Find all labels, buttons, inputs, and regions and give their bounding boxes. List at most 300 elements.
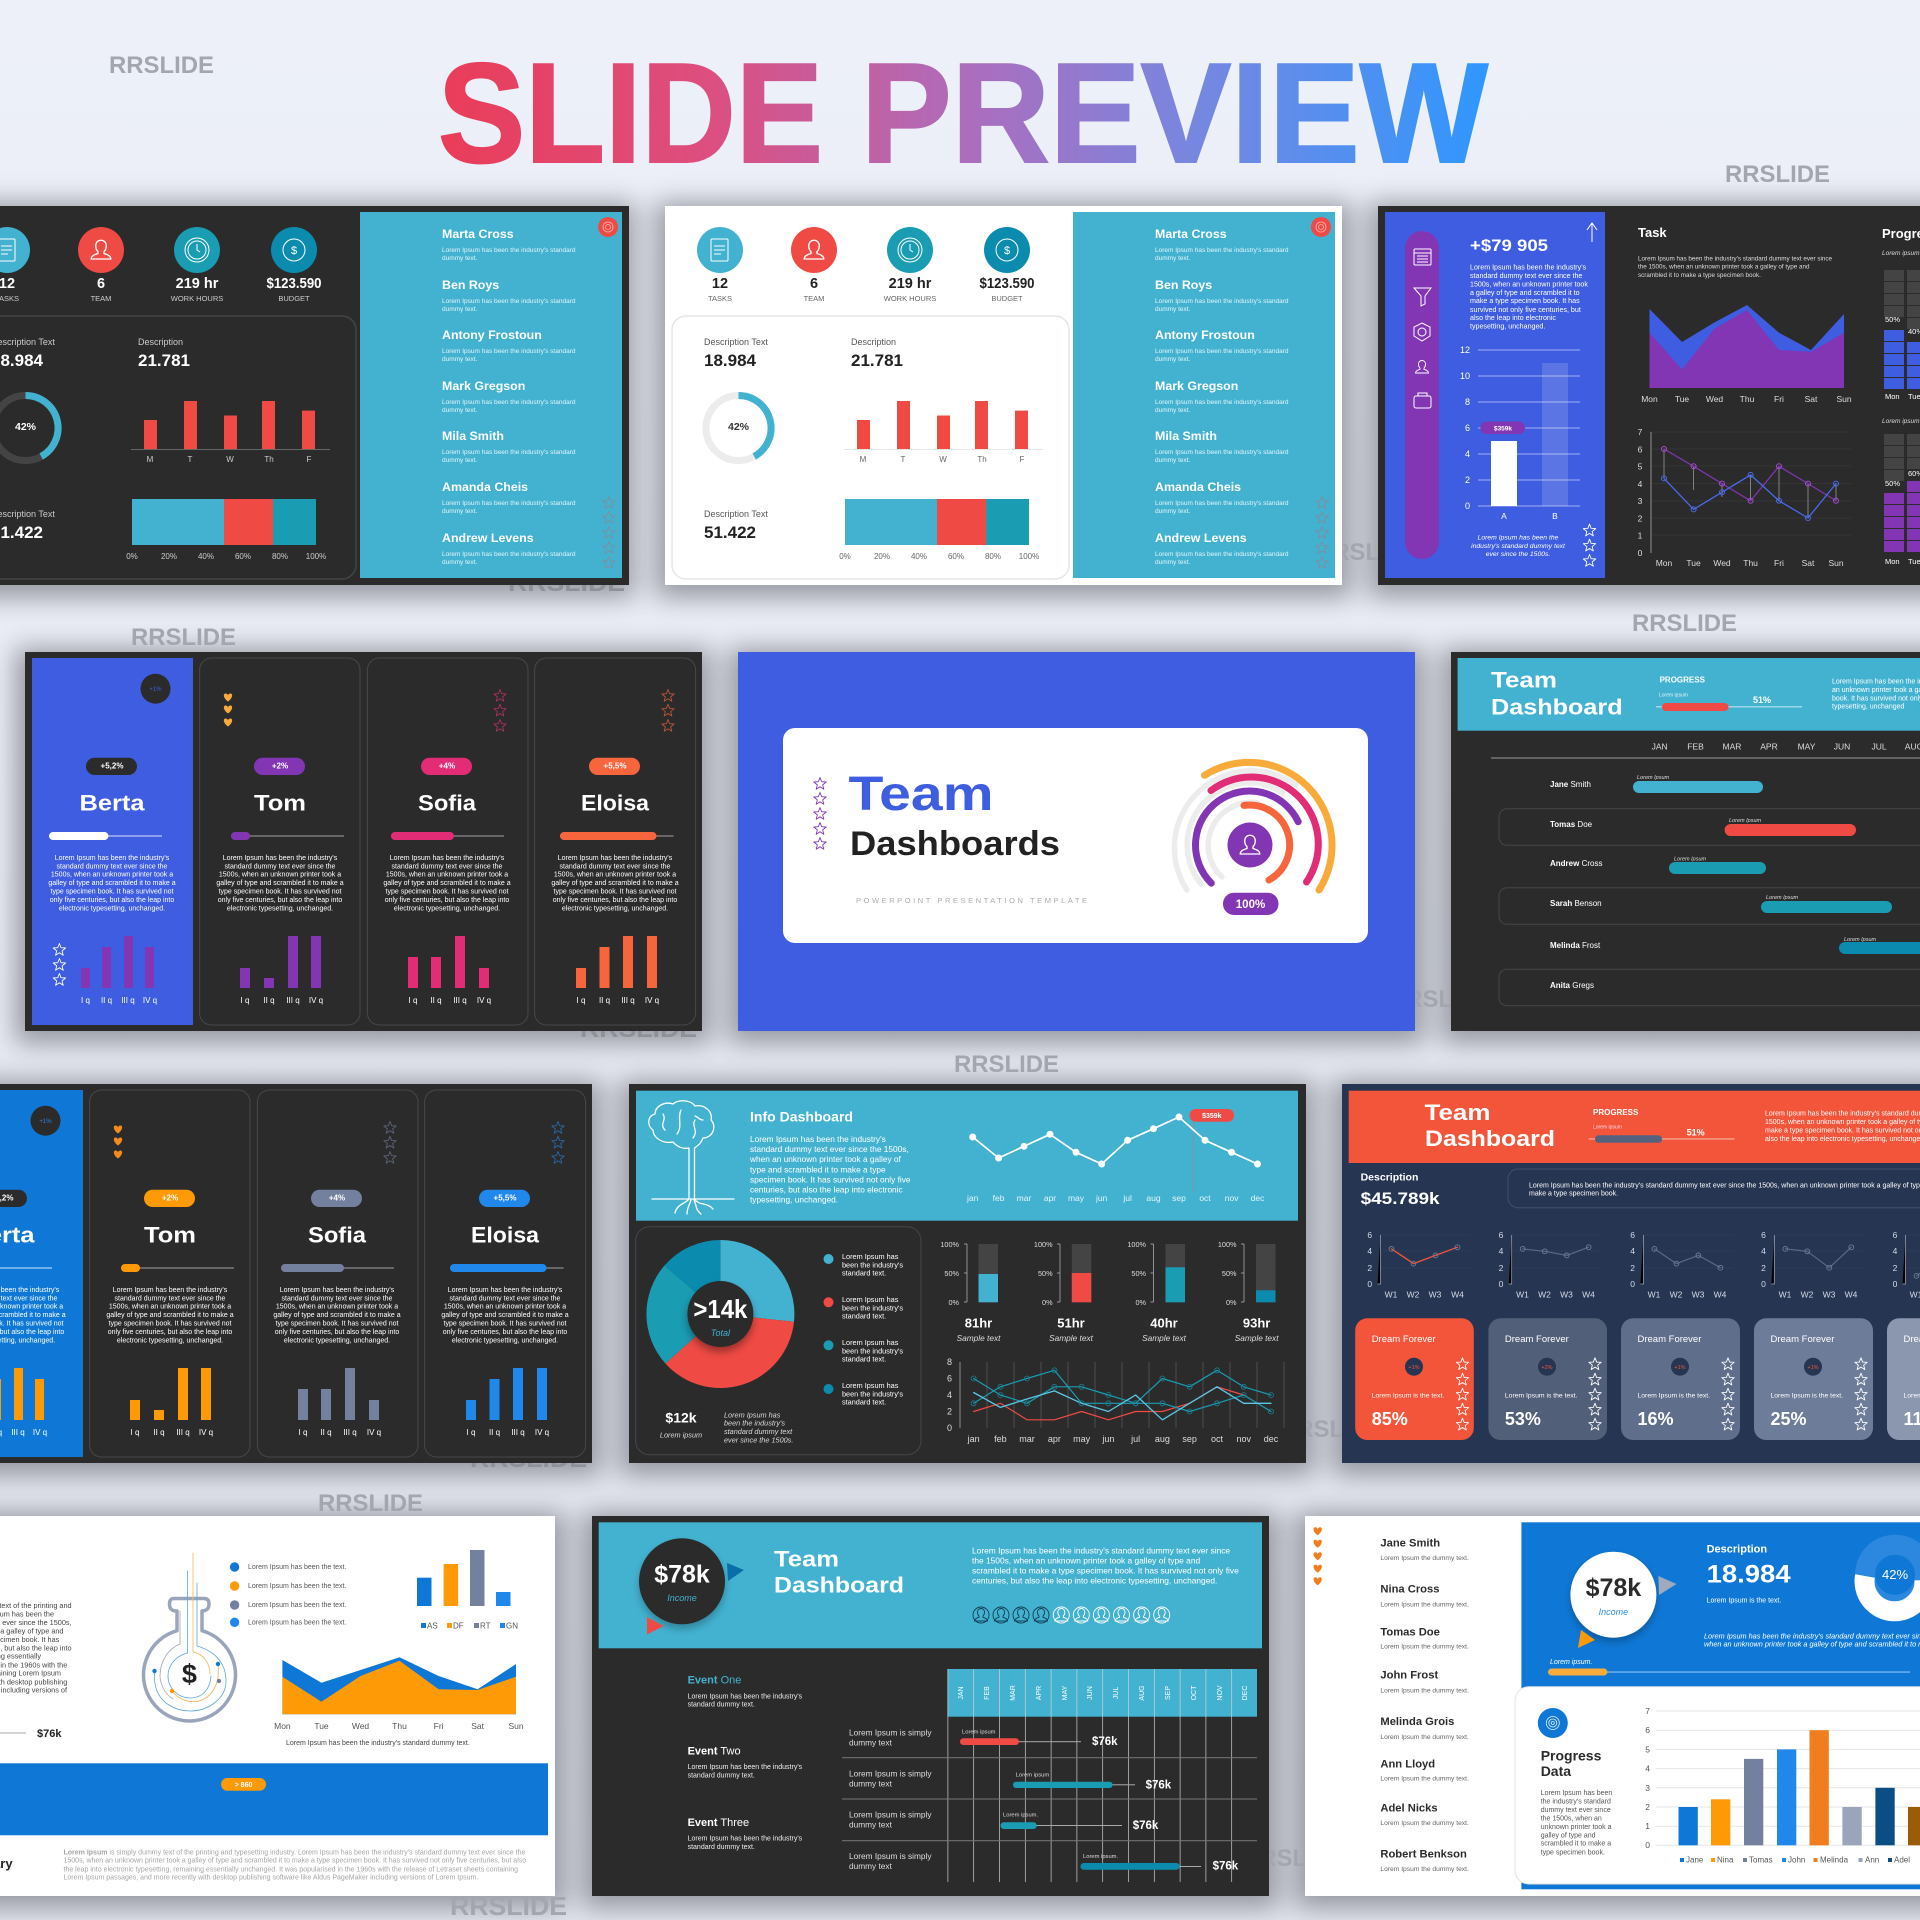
card: Sofia: type specimen book. It has survived not <box>276 1321 399 1328</box>
header: Income <box>667 1593 697 1603</box>
panel: light team overview slide <box>665 206 1342 585</box>
stats card: W <box>226 455 234 464</box>
donut chart: Total <box>711 1328 731 1338</box>
team list panel: dummy text. <box>442 508 478 515</box>
team list panel: dummy text. <box>442 559 478 566</box>
panel: cover slide <box>738 652 1415 1031</box>
card: Tom: galley of type and scrambled it to make a <box>216 880 344 887</box>
mini line charts: 0 <box>1630 1279 1635 1289</box>
blue summary panel: make a type specimen book. It has <box>1470 297 1580 305</box>
name list: Ann Lloyd <box>1380 1759 1435 1771</box>
mini line charts: 4 <box>1761 1246 1766 1256</box>
donut card: ever since the 1500s. <box>724 1435 793 1444</box>
timeline: JUL <box>1113 1687 1120 1699</box>
timeline: Lorem ipsum <box>962 1729 996 1735</box>
column chart <box>1645 1706 1920 1865</box>
mini line charts: W2 <box>1801 1290 1814 1300</box>
blue band <box>0 1763 548 1835</box>
card: Sofia: IV q <box>367 1428 381 1437</box>
card: Eloisa: II q <box>489 1428 500 1437</box>
timeline: FEB <box>984 1686 991 1700</box>
mini line charts: 6 <box>1761 1230 1766 1240</box>
radial progress gauge <box>1174 762 1332 890</box>
timeline: MAY <box>1062 1685 1069 1700</box>
card: Eloisa: III q <box>621 996 635 1005</box>
donut card: standard text. <box>842 1269 886 1278</box>
card: Sofia: type specimen book. It has survived not <box>386 889 509 896</box>
donut card: been the industry's <box>842 1303 903 1312</box>
card: Berta: II q <box>101 996 112 1005</box>
card: Tom: +2% <box>272 762 288 770</box>
card: Sofia: 1500s, when an unknown printer took a <box>276 1304 398 1311</box>
stats card: 100% <box>306 552 326 561</box>
timeline: Lorem Ipsum is simply <box>849 1810 932 1820</box>
card: Sofia: only five centuries, but also the leap into <box>275 1329 399 1336</box>
card: Berta <box>0 1090 83 1457</box>
progress columns: 100% <box>940 1240 960 1249</box>
team list panel: Lorem Ipsum has been the industry's standard <box>442 551 576 558</box>
line chart: mar <box>1017 1193 1031 1203</box>
month axis: JAN <box>1652 741 1668 751</box>
column chart A B: 8 <box>1465 397 1470 407</box>
line chart: 0 <box>1638 548 1643 558</box>
panel: white flask slide <box>0 1516 555 1896</box>
KPI icons: $ <box>1004 245 1010 257</box>
header band: standard dummy text ever since the 1500s, <box>750 1144 909 1154</box>
card: Sofia: electronic typesetting, unchanged. <box>394 905 500 912</box>
card: Sofia: standard dummy text ever since the <box>282 1296 393 1302</box>
card 85%: Dream Forever <box>1372 1334 1436 1345</box>
panel: light team overview slide: WORK HOURS <box>884 294 936 303</box>
donut card: standard dummy text <box>724 1427 793 1436</box>
gantt rows <box>1550 775 1920 990</box>
mini line charts: 0 <box>1367 1279 1372 1289</box>
line chart: 3 <box>1638 496 1643 506</box>
header: scrambled it to make a type specimen book. It has survived not only five <box>972 1565 1239 1575</box>
legend: Lorem Ipsum has been the text. <box>248 1619 346 1626</box>
KPI values: $123.590 <box>980 276 1034 292</box>
column chart: Tomas <box>1749 1856 1773 1865</box>
name list: Lorem Ipsum the dummy text. <box>1380 1601 1469 1608</box>
card: Sofia: Sofia <box>308 1223 367 1248</box>
card 53%: +2% <box>1541 1365 1553 1371</box>
icon: brain tree <box>649 1101 734 1214</box>
team list panel: Lorem Ipsum has been the industry's standard <box>1155 348 1289 355</box>
progress waffle charts: Lorem ipsum <box>1882 418 1920 425</box>
card: Berta: galley of type and scrambled it to make a <box>48 880 176 887</box>
timeline: $76k <box>1213 1861 1239 1873</box>
card 85% <box>1355 1318 1474 1440</box>
panel: dark team overview slide <box>0 206 629 585</box>
card: Eloisa <box>535 658 696 1025</box>
KPI icons <box>0 227 317 273</box>
column chart: John <box>1788 1856 1805 1865</box>
panel: team dashboard gantt slide <box>1451 652 1920 1031</box>
card: Sofia: II q <box>430 996 442 1005</box>
card 16%: Lorem Ipsum is the text. <box>1638 1393 1710 1400</box>
multi-line chart: jul <box>1130 1434 1140 1444</box>
KPI values: 12 <box>712 276 728 292</box>
header: 51% <box>1687 1127 1705 1137</box>
team list panel: dummy text. <box>1155 356 1191 363</box>
value line <box>0 1728 62 1740</box>
card 25%: Dream Forever <box>1770 1334 1834 1345</box>
team list panel: Lorem Ipsum has been the industry's standard <box>442 449 576 456</box>
header band: specimen book. It has survived not only five <box>750 1174 911 1184</box>
timeline: MAR <box>1010 1685 1017 1701</box>
mini line charts: W3 <box>1823 1290 1836 1300</box>
header: PROGRESS <box>1660 676 1706 685</box>
line chart: jun <box>1095 1193 1108 1203</box>
column chart: Nina <box>1717 1856 1734 1865</box>
card: Tom <box>90 1090 250 1457</box>
stats card: 40% <box>198 552 214 561</box>
progress columns: 0% <box>1135 1298 1147 1307</box>
panel: light team overview slide: TASKS <box>708 294 732 303</box>
progress waffle charts <box>1882 226 1920 566</box>
multi-line chart: nov <box>1236 1434 1251 1444</box>
summary footer: Lorem Ipsum passages, and more recently with desktop publishing software like Aldus PageMaker including versions of Lorem Ipsum. <box>64 1875 478 1882</box>
timeline: DEC <box>1242 1686 1249 1700</box>
team list panel: dummy text. <box>442 457 478 464</box>
watermarks: RRSLIDE <box>470 1446 587 1473</box>
team list panel: Lorem Ipsum has been the industry's standard <box>1155 449 1289 456</box>
progress data card <box>1515 1687 1920 1884</box>
timeline: $76k <box>1146 1779 1172 1791</box>
card: Tom: electronic typesetting, unchanged. <box>117 1337 223 1344</box>
name list: Nina Cross <box>1380 1584 1439 1596</box>
progress columns: 0% <box>948 1298 960 1307</box>
card: Tom: I q <box>241 996 249 1005</box>
area chart: Thu <box>392 1721 407 1731</box>
team list panel: dummy text. <box>442 255 478 262</box>
stats card: 20% <box>874 552 890 561</box>
progress columns: 100% <box>1127 1240 1147 1249</box>
gantt rows: Lorem Ipsum <box>1674 857 1707 863</box>
stats card: W <box>939 455 947 464</box>
blue band: > 860 <box>235 1782 252 1789</box>
multi-line chart: 6 <box>947 1374 952 1384</box>
timeline: APR <box>1036 1686 1043 1700</box>
card: Sofia: Lorem Ipsum has been the industry's <box>280 1287 395 1294</box>
mini line charts: W3 <box>1692 1290 1705 1300</box>
team list panel: Andrew Levens <box>1155 531 1247 545</box>
card: Eloisa: IV q <box>535 1428 549 1437</box>
events list: Event Two <box>688 1745 741 1757</box>
multi-line chart: oct <box>1211 1434 1223 1444</box>
team list panel <box>1073 212 1335 578</box>
card: Eloisa: type specimen book. It has survived not <box>554 889 677 896</box>
timeline: Lorem ipsum. <box>1003 1813 1039 1819</box>
gantt rows: Lorem Ipsum <box>1844 937 1877 943</box>
mini line charts: 4 <box>1499 1246 1504 1256</box>
card: Eloisa: I q <box>577 996 585 1005</box>
header: Dashboard <box>774 1573 904 1598</box>
KPI values <box>712 276 1034 292</box>
gantt rows: Sarah Benson <box>1550 899 1602 908</box>
blue summary panel: typesetting, unchanged. <box>1470 323 1545 331</box>
area chart <box>1641 305 1852 404</box>
blue summary panel: Income <box>1599 1607 1628 1617</box>
progress data card: the industry's standard <box>1541 1798 1611 1805</box>
card: Tom: Lorem Ipsum has been the industry's <box>113 1287 228 1294</box>
card 53%: Dream Forever <box>1505 1334 1569 1345</box>
card: Eloisa: electronic typesetting, unchanged. <box>562 905 668 912</box>
mini line charts: 2 <box>1761 1263 1766 1273</box>
stats card: Th <box>977 455 987 464</box>
card: Berta: +5,2% <box>101 762 123 770</box>
mini line charts: 2 <box>1893 1263 1898 1273</box>
line chart: Sun <box>1828 558 1844 568</box>
card: Eloisa: 1500s, when an unknown printer took a <box>444 1304 566 1311</box>
panel: light team overview slide: TEAM <box>804 294 824 303</box>
donut chart <box>646 1240 794 1388</box>
card: Sofia: I q <box>409 996 417 1005</box>
progress columns: 93hr <box>1243 1316 1270 1331</box>
area chart: Mon <box>1641 394 1658 404</box>
column chart: 5 <box>1645 1744 1650 1754</box>
header band: when an unknown printer took a galley of <box>749 1154 902 1164</box>
team list panel: dummy text. <box>442 306 478 313</box>
column chart: 0 <box>1645 1840 1650 1850</box>
area chart: Sun <box>1836 394 1852 404</box>
team list panel: Mila Smith <box>442 429 504 443</box>
team list panel: dummy text. <box>1155 407 1191 414</box>
blue summary panel: Lorem Ipsum has been the industry's <box>1470 263 1587 271</box>
header: $78k <box>654 1561 710 1589</box>
card: Berta: type specimen book. It has survived not <box>51 889 174 896</box>
card: Berta: I q <box>81 996 90 1005</box>
summary footer <box>0 1849 526 1882</box>
KPI values: 6 <box>97 276 105 292</box>
team list panel: Antony Frostoun <box>442 328 542 342</box>
multi-line chart: sep <box>1182 1434 1197 1444</box>
progress columns: 100% <box>1034 1240 1053 1249</box>
card: Sofia <box>367 658 528 1025</box>
events list: standard dummy text. <box>688 1844 755 1851</box>
mini line charts: 2 <box>1630 1263 1635 1273</box>
column chart: Jane <box>1686 1856 1704 1865</box>
line chart: 2 <box>1638 514 1643 524</box>
area chart: Sat <box>1805 394 1818 404</box>
column chart: 6 <box>1645 1725 1650 1735</box>
blue summary panel: also the leap into electronic <box>1470 314 1556 322</box>
stats card <box>672 316 1069 579</box>
card: Tom: type specimen book. It has survived not <box>219 889 342 896</box>
donut card: standard text. <box>842 1398 886 1407</box>
area chart: Wed <box>1706 394 1723 404</box>
card: Berta: electronic typesetting, unchanged. <box>59 905 165 912</box>
multi-line chart: jun <box>1101 1434 1114 1444</box>
card: Berta <box>32 658 193 1025</box>
card: Sofia: Sofia <box>418 791 477 816</box>
name list: Adel Nicks <box>1380 1802 1438 1814</box>
blue summary panel: survived not only five centuries, but <box>1470 306 1581 314</box>
multi-line chart: may <box>1073 1434 1091 1444</box>
team list panel: Marta Cross <box>442 227 514 241</box>
stats card: 100% <box>1019 552 1039 561</box>
donut: 42% <box>1882 1567 1908 1582</box>
progress waffle charts: Mon <box>1885 392 1900 401</box>
team list panel: Amanda Cheis <box>1155 480 1241 494</box>
card: Berta: IV q <box>143 996 157 1005</box>
card: Sofia: III q <box>343 1428 357 1437</box>
blue summary panel: +$79 905 <box>1470 236 1548 255</box>
mini line charts: W1 <box>1385 1290 1398 1300</box>
mini line charts: 4 <box>1893 1246 1898 1256</box>
card: Tom: type specimen book. It has survived not <box>109 1321 232 1328</box>
line chart: apr <box>1044 1193 1056 1203</box>
card 25% <box>1754 1318 1873 1440</box>
header: Dashboard <box>1425 1126 1555 1151</box>
card: Tom: galley of type and scrambled it to make a <box>106 1312 234 1319</box>
mini line charts: 0 <box>1499 1279 1504 1289</box>
line chart: dec <box>1251 1193 1265 1203</box>
team list panel: dummy text. <box>1155 457 1191 464</box>
progress columns: Sample text <box>1049 1333 1094 1343</box>
card: Eloisa <box>425 1090 586 1457</box>
summary footer: Lorem Ipsum is simply dummy text of the printing and typesetting industry. Lorem Ipsum has been the industry's standard dummy text ever since the <box>64 1849 525 1856</box>
card: Tom: III q <box>286 996 300 1005</box>
card: Eloisa: only five centuries, but also the leap into <box>553 897 677 904</box>
task heading and text: Task <box>1638 225 1667 240</box>
line chart: aug <box>1146 1193 1161 1203</box>
panel: info dashboard slide <box>629 1084 1306 1463</box>
line chart: Thu <box>1743 558 1758 568</box>
card: Tom: only five centuries, but also the leap into <box>108 1329 232 1336</box>
stats card: Description Text <box>704 509 768 519</box>
multi-line chart: 4 <box>947 1390 952 1400</box>
progress data card: dummy text ever since <box>1541 1807 1611 1814</box>
card: Berta: only five centuries, but also the leap into <box>50 897 174 904</box>
card 53% <box>1488 1318 1607 1440</box>
card: Eloisa: IV q <box>645 996 659 1005</box>
team list panel: Ben Roys <box>1155 278 1212 292</box>
watermarks: RRSLIDE <box>109 52 214 79</box>
timeline: Lorem Ipsum is simply <box>849 1851 932 1861</box>
column chart A B: B <box>1552 511 1558 521</box>
card: Tom: III q <box>176 1428 190 1437</box>
card: Eloisa: Lorem Ipsum has been the industry's <box>448 1287 563 1294</box>
KPI values: $123.590 <box>266 276 322 292</box>
timeline: JUN <box>1087 1686 1094 1700</box>
bar chart: RT <box>480 1622 491 1630</box>
gantt rows: Lorem Ipsum <box>1766 895 1799 901</box>
watermarks: RRSLIDE <box>131 624 236 651</box>
card: Berta: IV q <box>33 1428 47 1437</box>
stats card: 60% <box>948 552 964 561</box>
progress data card: the 1500s, when an <box>1541 1815 1602 1822</box>
name list: John Frost <box>1380 1670 1438 1682</box>
name list: Lorem Ipsum the dummy text. <box>1380 1820 1469 1827</box>
header: typesetting, unchanged <box>1832 704 1904 711</box>
card: Tom: II q <box>153 1428 165 1437</box>
card: Eloisa: Lorem Ipsum has been the industry's <box>558 855 673 862</box>
column chart: Ann <box>1865 1856 1879 1865</box>
team list panel: Lorem Ipsum has been the industry's standard <box>442 348 576 355</box>
timeline: Lorem ipsum <box>1016 1773 1049 1779</box>
blue summary panel: ever since the 1500s. <box>1486 551 1550 558</box>
progress waffle charts: 50% <box>1885 315 1900 324</box>
line chart: 1 <box>1638 530 1643 540</box>
stats card: 40% <box>911 552 927 561</box>
line chart: Wed <box>1713 558 1731 568</box>
stats card: T <box>901 455 906 464</box>
progress columns: 0% <box>1042 1298 1053 1307</box>
progress columns: 40hr <box>1150 1316 1178 1331</box>
card: Sofia: galley of type and scrambled it to make a <box>383 880 511 887</box>
column chart: 4 <box>1645 1764 1650 1774</box>
card 16% <box>1621 1318 1740 1440</box>
multi-line chart: 0 <box>947 1423 952 1433</box>
column chart: Melinda <box>1820 1856 1849 1865</box>
timeline: NOV <box>1217 1685 1224 1701</box>
KPI values <box>0 276 322 292</box>
progress data card: scrambled it to make a <box>1541 1841 1611 1848</box>
stats card: 80% <box>985 552 1001 561</box>
card 25%: Lorem Ipsum is the text. <box>1770 1393 1843 1400</box>
blue summary panel: $78k <box>1586 1574 1641 1602</box>
line chart: $359k <box>1202 1113 1222 1120</box>
card: Tom: only five centuries, but also the leap into <box>218 897 342 904</box>
column chart A B: 0 <box>1465 501 1470 511</box>
header band: type and scrambled it to make a type <box>750 1164 886 1174</box>
timeline: Lorem Ipsum is simply <box>849 1727 932 1737</box>
progress columns <box>940 1240 1279 1343</box>
header band: Info Dashboard <box>750 1110 853 1125</box>
KPI values: 219 hr <box>889 276 932 292</box>
events list: Event Three <box>688 1817 749 1829</box>
header: Team <box>1491 668 1557 693</box>
mini line charts: 6 <box>1630 1230 1635 1240</box>
multi-line chart: aug <box>1155 1434 1170 1444</box>
bar chart: GN <box>506 1622 518 1630</box>
mini line charts: 6 <box>1367 1230 1372 1240</box>
donut card: standard text. <box>842 1355 886 1364</box>
mini line charts: W4 <box>1451 1290 1464 1300</box>
panel: dark team overview slide: TEAM <box>91 294 111 303</box>
header band: typesetting, unchanged. <box>750 1195 838 1205</box>
donut card: standard text. <box>842 1312 886 1321</box>
stats card: Description <box>138 337 183 347</box>
header: Lorem ipsum <box>1593 1124 1622 1130</box>
events list: standard dummy text. <box>688 1702 755 1709</box>
team list panel: Lorem Ipsum has been the industry's standard <box>1155 500 1289 507</box>
progress columns: 50% <box>944 1269 960 1278</box>
progress columns: 81hr <box>965 1316 992 1331</box>
gantt rows: Anita Gregs <box>1550 981 1594 990</box>
watermarks: RRSLIDE <box>1315 539 1420 566</box>
mini line charts: 2 <box>1499 1263 1504 1273</box>
area chart: Mon <box>274 1721 291 1731</box>
line chart: 5 <box>1638 462 1643 472</box>
month axis: APR <box>1760 741 1778 751</box>
card: Tom: electronic typesetting, unchanged. <box>227 905 333 912</box>
stats card: F <box>307 455 312 464</box>
donut card: been the industry's <box>842 1346 903 1355</box>
card: Eloisa: type specimen book. It has survived not <box>444 1321 567 1328</box>
progress data card: Data <box>1541 1763 1571 1779</box>
header <box>1458 658 1920 731</box>
watermarks: RRSLIDE <box>1388 986 1493 1013</box>
timeline: $76k <box>1092 1736 1118 1748</box>
header: Lorem Ipsum has been the industry's standard dummy text ever since <box>972 1545 1230 1555</box>
team list panel: Lorem Ipsum has been the industry's standard <box>442 399 576 406</box>
line chart: nov <box>1225 1193 1239 1203</box>
timeline: dummy text <box>849 1778 893 1788</box>
name list: Lorem Ipsum the dummy text. <box>1380 1555 1469 1562</box>
panel: dark team overview slide: WORK HOURS <box>171 294 223 303</box>
